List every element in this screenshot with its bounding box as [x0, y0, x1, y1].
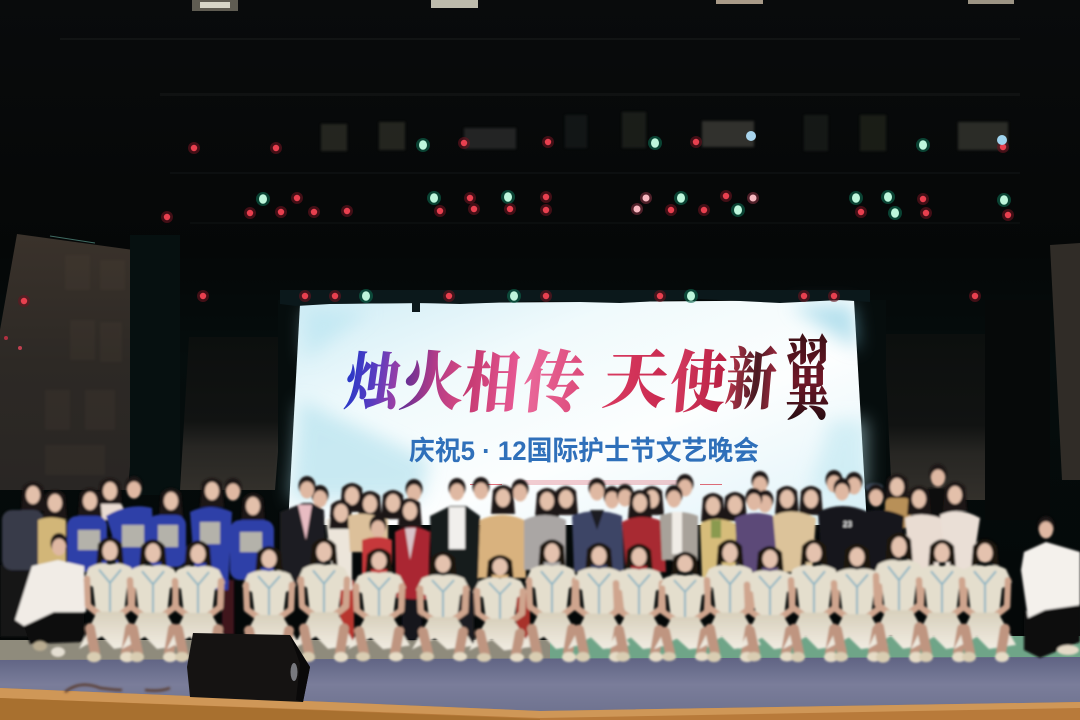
legs of standing row	[0, 560, 530, 645]
screen title calligraphy	[339, 331, 836, 431]
screen subtitle: 庆祝5 · 12国际护士节文艺晚会	[409, 436, 759, 466]
wooden stage front	[0, 688, 1080, 720]
screen title calligraphy: 使	[668, 347, 729, 421]
screen decorative blue washes	[290, 305, 866, 500]
stage lights, second row	[161, 190, 1014, 223]
stage floor	[0, 657, 1080, 712]
man in black jacket and white shirt	[430, 478, 480, 590]
top ceiling lights	[192, 0, 1014, 11]
group of performers	[0, 464, 1080, 663]
centre row adults	[478, 478, 736, 578]
screen red caption line	[470, 480, 722, 485]
screen title calligraphy: 翼	[785, 331, 836, 431]
screen title calligraphy: 相	[459, 348, 523, 421]
stage monitor speaker	[187, 633, 310, 702]
screen title calligraphy: 新	[723, 343, 780, 418]
floor behind performers	[0, 636, 1080, 662]
curtain panel centre right	[858, 300, 1050, 520]
back row: staff and teachers	[97, 464, 955, 528]
cable on floor	[65, 685, 170, 692]
screen title calligraphy: 火	[397, 347, 468, 418]
seated man left	[15, 533, 86, 657]
stage lights, first row	[188, 131, 1009, 154]
right row adults: 23	[843, 520, 852, 529]
left standing women	[2, 482, 67, 570]
kneeling man right	[1021, 516, 1080, 658]
lighting truss	[60, 38, 1020, 224]
screen title calligraphy: 烛	[339, 348, 410, 418]
screen title calligraphy: 天	[600, 345, 672, 416]
man in black suit with pink shirt	[280, 476, 326, 585]
screen title calligraphy: 传	[519, 346, 588, 421]
side wall panel left	[0, 234, 148, 490]
seated nurses row	[79, 533, 1016, 663]
valance above screen	[280, 290, 870, 312]
side wall panel right	[1050, 243, 1080, 480]
hanging stage fixtures	[321, 112, 1008, 151]
LED screen	[197, 289, 981, 525]
screen edge lights	[197, 289, 981, 303]
curtain panel centre left	[130, 235, 300, 495]
right row adults	[735, 478, 980, 572]
women in white and red	[326, 491, 430, 600]
blue shirt performers	[67, 476, 274, 590]
